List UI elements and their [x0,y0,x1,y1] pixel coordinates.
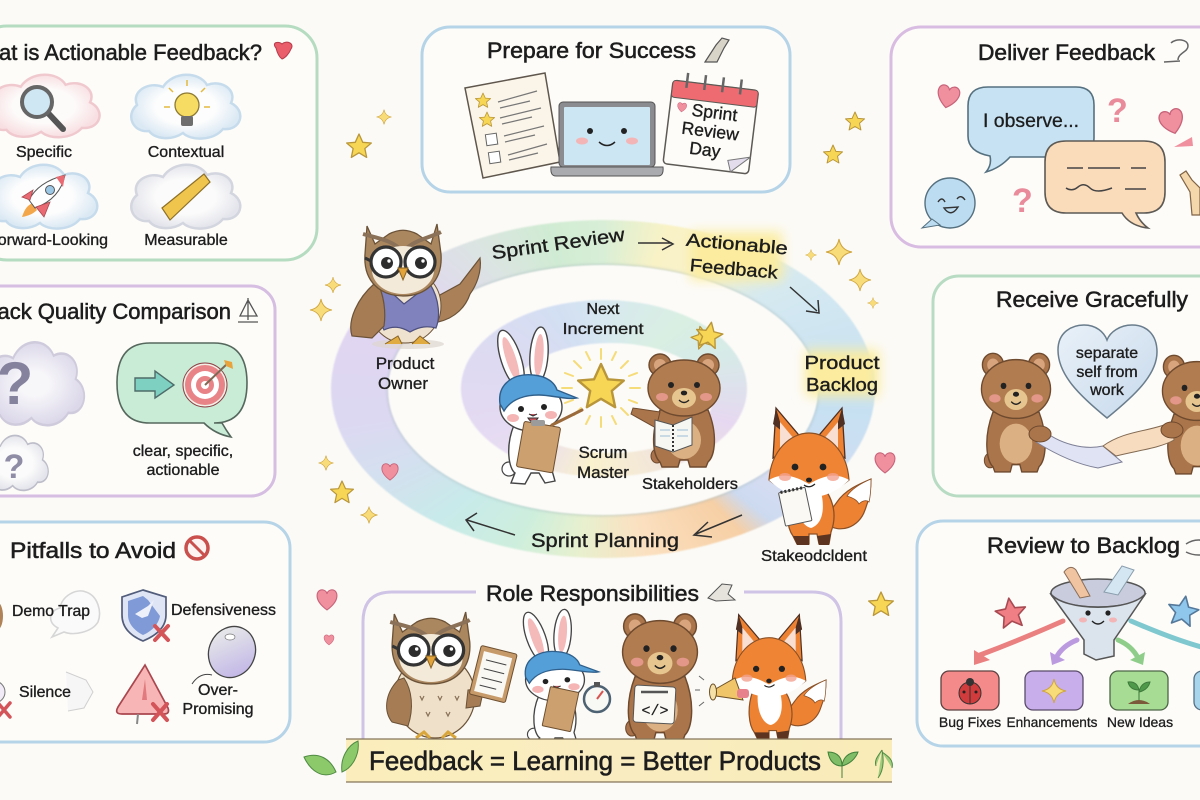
panel: review to backlog [917,521,1200,746]
tile: enhancements [1006,671,1098,730]
icon: colored stars [994,594,1200,629]
icon: balloon [192,619,264,685]
label: sprint planning: Sprint Planning [531,531,679,552]
heading: review to backlog: Review to Backlog [987,533,1180,558]
icon: arrow [135,371,174,398]
icon: clipboard [542,687,579,732]
label: product owner: Owner [378,374,428,393]
icon: pink question marks [1012,92,1128,220]
cloud: vague feedback with question mark [0,342,84,425]
decorative hearts [317,453,895,645]
icon: no entry [186,537,208,559]
arms and handshake [1029,422,1183,468]
icon: code tablet: </> [641,703,669,720]
label: clear specific actionable [133,443,233,479]
label: defensiveness: Defensiveness [171,602,276,619]
icon: stopwatch [584,682,610,712]
small twin star [689,320,725,350]
icon: target [183,360,233,407]
slogan banner [304,739,892,782]
label: scrum master: Master [577,463,629,482]
character: rabbit with stopwatch [518,609,610,748]
icon: balance lines [238,298,258,322]
calendar: sprint review day: Review [681,118,740,145]
heading: prepare for success: Prepare for Success [487,38,696,63]
character: fox stakeholder [769,408,871,545]
icon: sprout right [875,750,892,778]
icon: scribble [708,584,735,601]
outer sprint cycle ring [331,220,875,558]
speech bubble: I observe: I observe... [983,111,1079,132]
icon: pink question marks: ? [1012,182,1033,220]
label: clear specific actionable: clear, specific, [133,443,233,460]
icon: pink question marks: ? [1107,92,1128,130]
slogan text: Feedback = Learning = Better Products [369,746,821,776]
label: product backlog [804,353,880,395]
label: over-promising [182,682,254,718]
calendar: sprint review day [663,71,760,174]
panel: what is actionable feedback [0,26,317,260]
bear: left [981,353,1051,472]
label: over-promising: Over- [198,682,238,699]
arrow: feedback to backlog [790,287,819,313]
arrow: planning right [694,515,742,537]
heading: deliver feedback: Deliver Feedback [978,40,1156,65]
cloud: forward-looking [0,165,108,249]
icon: pencil [705,38,729,62]
speech bubble: I observe [968,87,1094,172]
label: product owner [376,354,435,393]
panel: feedback quality comparison [0,286,275,496]
icon: smiling laptop [551,102,663,176]
label: next increment: Increment [562,321,644,338]
arrow: review to feedback [638,238,673,250]
label: scrum master [577,443,629,482]
icon: cracked shield [122,590,168,641]
label: sprint review: Sprint Review [490,225,626,264]
icon: question scribble [1164,40,1188,62]
label: measurable: Measurable [144,232,228,249]
icon: ruler [162,174,210,220]
label: scrum master: Scrum [578,443,628,462]
label: actionable feedback: Feedback [689,255,780,283]
tile: bug fixes: Bug Fixes [939,714,1001,730]
character: owl with clipboard [387,612,517,738]
cloud: small vague bubble: ? [4,448,24,486]
icon: megaphone [695,676,749,706]
character: fox with megaphone [695,615,826,741]
panel: prepare for success [422,27,790,192]
label: stakeodcldent: Stakeodcldent [761,548,868,565]
highlight glows [690,232,879,396]
tile: new ideas [1107,671,1173,730]
calendar: sprint review day: Day [688,138,722,161]
icon: light bulb [164,80,210,126]
label: silence: Silence [19,684,71,701]
heading: pitfalls to avoid: Pitfalls to Avoid [10,538,176,563]
icon: clipboard [516,420,561,473]
label: product owner: Product [376,354,435,373]
cloud: contextual [131,75,240,161]
bubble: demo trap: Demo Trap [12,603,90,620]
label: over-promising: Promising [182,701,254,718]
panel: deliver feedback [891,27,1200,247]
icon: torn heart [274,42,292,59]
glowing center star [562,349,640,427]
character: owl product owner [351,224,480,349]
tile: bug fixes [939,671,1001,730]
icon: magnifying glass [22,87,63,129]
character: bear with code tablet [623,614,697,740]
tile: cut-off blue [1194,671,1200,710]
tile: enhancements: Enhancements [1006,714,1098,730]
icon: waving hand [1180,171,1200,215]
checklist document [465,73,560,178]
label: next increment [562,301,644,338]
icon: silence bubble [0,672,93,717]
icon: left leaves [304,741,358,775]
label: specific: Specific [16,144,72,161]
icon: notebook [655,417,692,452]
panel: pitfalls to avoid [0,522,290,742]
label: actionable feedback: Actionable [685,230,789,258]
inner increment ring [461,300,747,477]
heading: receive gracefully: Receive Gracefully [996,287,1188,312]
cloud: measurable [131,165,240,249]
bubble: demo trap [0,591,100,637]
flow arrows [980,621,1200,658]
heading: role responsibilities: Role Responsibilities [486,581,699,606]
label: actionable feedback [683,230,789,283]
tile: new ideas: New Ideas [1107,714,1173,730]
heart callout: separate self from work: separate [1076,345,1138,362]
decorative stars and sparkles [310,110,893,615]
panel: role responsibilities [363,581,841,748]
icon: warning triangle [117,665,168,724]
label: product backlog: Product [804,353,880,373]
panel: receive gracefully [933,276,1200,496]
icon: small smiling bubble [922,178,975,228]
label: product backlog: Backlog [806,375,878,395]
speech bubble: peach reply [1045,141,1165,228]
icon: owl clipboard [469,645,517,703]
cycle labels [376,225,880,565]
icon: notepad [779,487,812,526]
icon: sprout [828,752,858,778]
icon: hearts [935,84,1193,147]
icon: pencil [552,410,582,425]
bear: right [1162,355,1200,474]
icon: loop arrows [1186,540,1200,555]
label: stakeholders: Stakeholders [642,476,738,493]
speech bubble: clear target [117,343,247,437]
character: rabbit scrum master [492,326,582,484]
label: contextual: Contextual [148,144,224,161]
heart callout: separate self from work: self from [1076,364,1138,381]
arrow: planning left [466,513,515,535]
icon: rocket [22,175,65,217]
heart callout: separate self from work: work [1089,382,1125,399]
heart callout: separate self from work [1058,325,1157,418]
label: next increment: Next [587,301,620,318]
label: clear specific actionable: actionable [147,462,220,479]
cloud: specific [0,75,100,161]
arrowheads [974,650,1145,665]
funnel with feedback rolls [1050,566,1146,660]
cloud: small vague bubble [0,435,48,490]
calendar: sprint review day: Sprint [691,100,739,125]
character: bear stakeholder [631,354,720,467]
